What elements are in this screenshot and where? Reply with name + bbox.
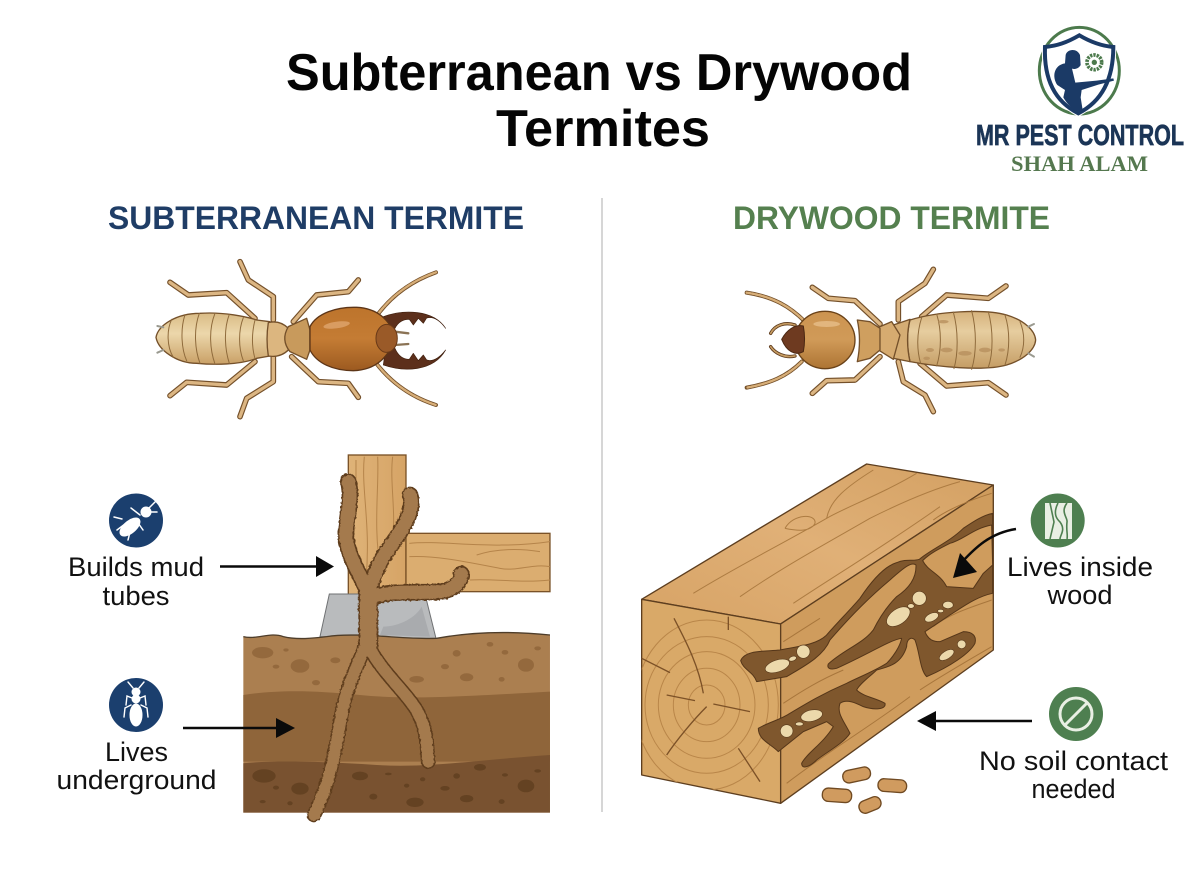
horizontal beam: [406, 533, 550, 592]
title: Subterranean vs Drywood: [286, 44, 912, 102]
illustration: drywood termite: [747, 269, 1036, 412]
icon: wood grain: [1031, 494, 1085, 548]
wooden post: [348, 455, 406, 597]
mandibles: [383, 312, 446, 328]
label: lives underground: Lives: [105, 737, 168, 767]
legs: [812, 269, 1006, 412]
antennae: [747, 293, 805, 388]
arrow: no soil contact: [917, 711, 1032, 731]
head: [795, 311, 855, 369]
top face: [642, 464, 993, 624]
title: [286, 44, 912, 158]
abdomen: [907, 311, 1036, 368]
logo: Mr Pest Control Shah Alam: [976, 27, 1184, 176]
label: builds mud tubes: [68, 552, 204, 611]
mud tubes: [314, 482, 461, 815]
illustration: mud tubes on wood and soil cross-section: [243, 455, 550, 815]
side face: [781, 485, 993, 803]
soil layers: [243, 633, 550, 813]
thorax: [893, 319, 910, 362]
termite galleries: [741, 513, 993, 767]
arrow: to gallery: [953, 529, 1016, 578]
illustration: subterranean termite soldier: [156, 262, 446, 417]
thorax: [267, 322, 288, 356]
label: builds mud tubes: Builds mud: [68, 552, 204, 582]
title: Termites: [496, 100, 710, 158]
wood island: [923, 525, 993, 588]
icon: termite, underground: [109, 678, 163, 732]
wood pellets: [822, 766, 907, 815]
mandibles: [771, 324, 795, 357]
logo location: SHAH ALAM: [1011, 151, 1148, 176]
arrow: to mud tube: [220, 556, 334, 577]
icon: shield emblem: [1039, 27, 1119, 117]
label: lives inside wood: Lives inside: [1007, 552, 1153, 582]
heading: subterranean termite: SUBTERRANEAN TERMITE: [108, 200, 524, 236]
legs: [170, 262, 358, 417]
label: lives underground: [56, 737, 216, 795]
divider: [601, 198, 603, 812]
label: no soil contact needed: needed: [1032, 774, 1116, 804]
icon: prohibited sign: [1049, 687, 1103, 741]
head: [310, 307, 397, 371]
front face with growth rings: [635, 599, 781, 803]
arrow: to soil: [183, 718, 295, 738]
icon: termite, mud tubes: [109, 494, 163, 548]
label: lives inside wood: [1007, 552, 1153, 610]
abdomen: [156, 313, 270, 364]
antennae: [375, 272, 436, 405]
label: no soil contact needed: [979, 746, 1169, 804]
label: lives underground: underground: [56, 765, 216, 795]
heading: drywood termite: DRYWOOD TERMITE: [733, 200, 1050, 236]
concrete footing: [320, 594, 436, 638]
illustration: cutaway wood block with galleries: [635, 464, 993, 815]
termites in galleries: [763, 591, 966, 737]
label: no soil contact needed: No soil contact: [979, 746, 1169, 776]
label: lives inside wood: wood: [1046, 580, 1112, 610]
label: builds mud tubes: tubes: [102, 581, 170, 611]
